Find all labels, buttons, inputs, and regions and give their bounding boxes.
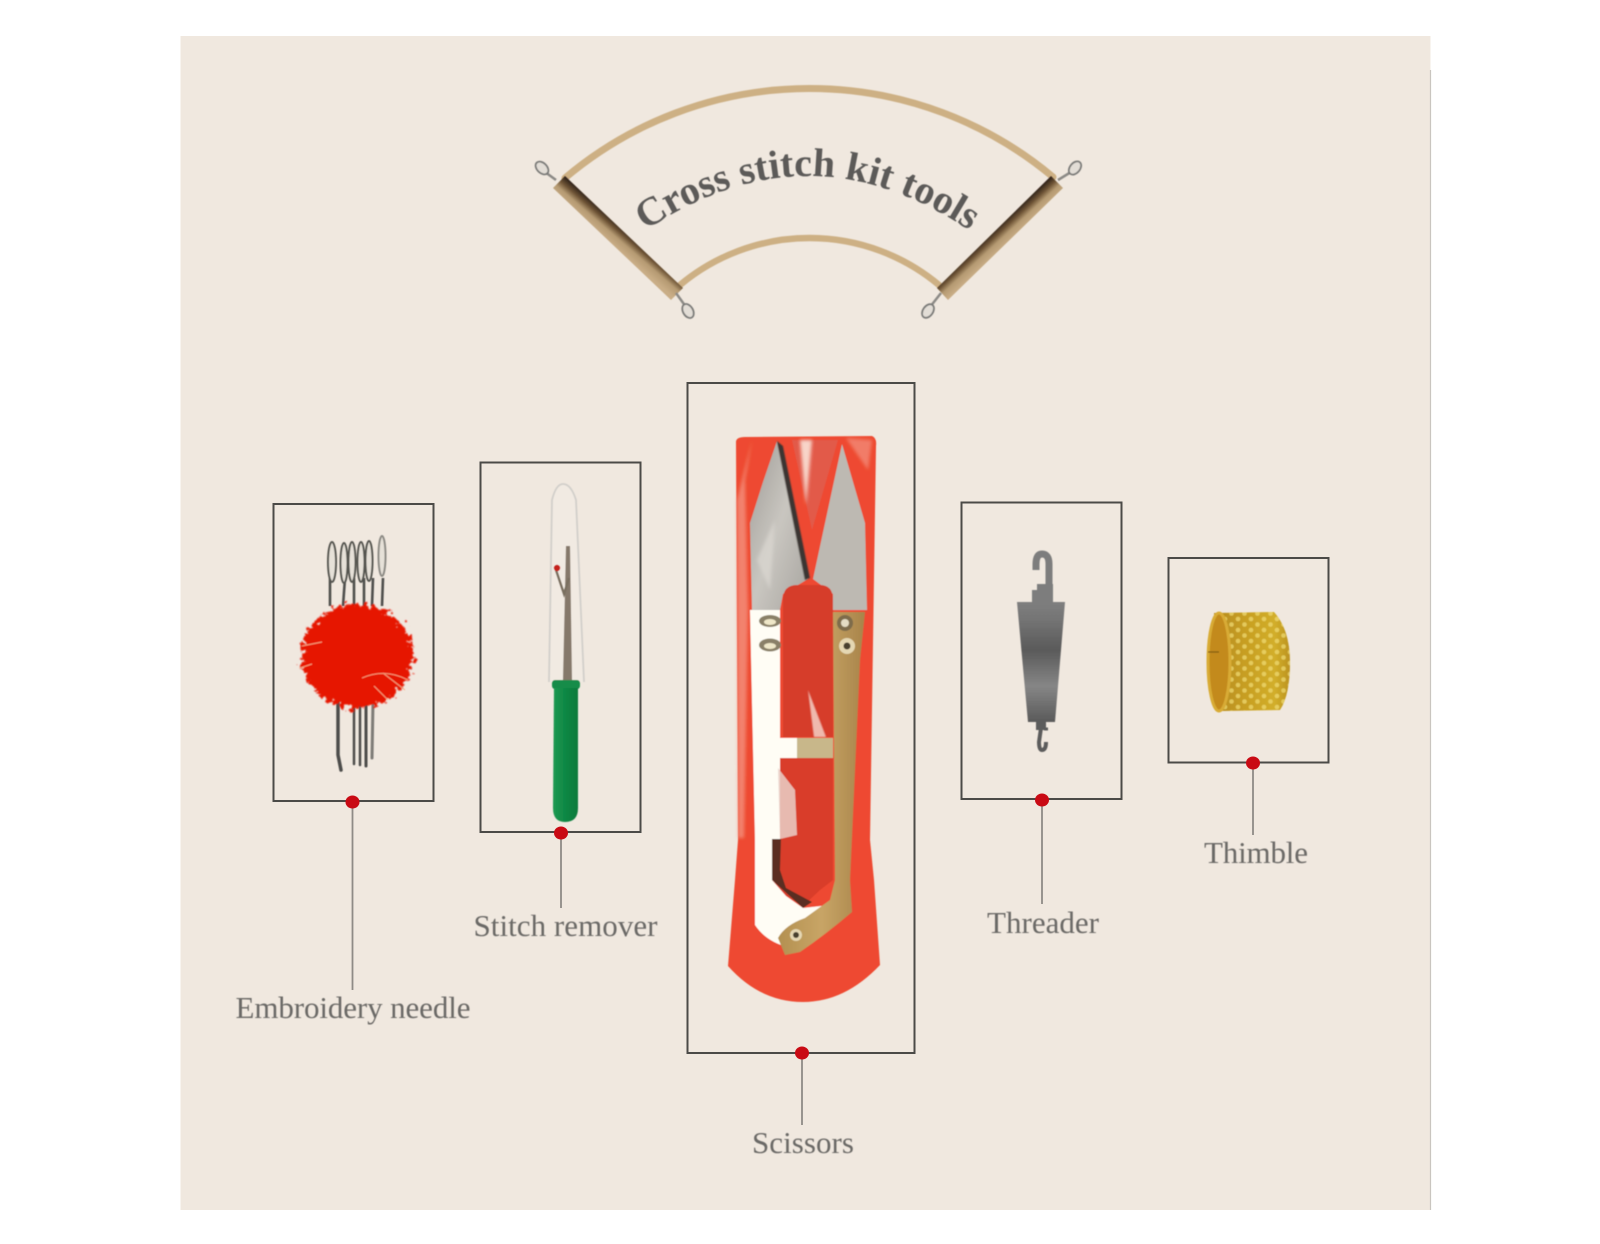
label: scissors: Scissors	[752, 1125, 854, 1160]
label: thimble: Thimble	[1204, 835, 1308, 870]
tool: stitch remover	[474, 462, 658, 943]
icon: thread snips in red sleeve	[728, 436, 880, 1002]
frame: right roller	[920, 159, 1084, 320]
icon: gold thimble	[1208, 612, 1290, 711]
part: brass arm	[778, 612, 865, 955]
title text: Cross stitch kit tools	[637, 148, 978, 229]
icon: metal needle threader	[1017, 554, 1065, 750]
tool: thimble	[1168, 558, 1328, 870]
title banner: embroidery frame with curved heading	[534, 84, 1083, 320]
tool: embroidery needle	[236, 504, 470, 1025]
icon: seam ripper	[549, 484, 584, 822]
frame: threader box	[962, 502, 1122, 799]
frame: scissors box	[688, 383, 914, 1053]
part: upper red handle	[783, 585, 833, 737]
label: threader: Threader	[987, 905, 1100, 940]
part: lower red handle	[772, 758, 833, 906]
marker and leader	[346, 796, 360, 990]
marker and leader	[1246, 756, 1260, 835]
tool: threader	[962, 502, 1122, 940]
frame: outer and inner cords	[565, 89, 1053, 285]
icon: needles and red pompom	[300, 536, 413, 770]
panel: cream background	[180, 36, 1430, 1210]
tool: scissors	[688, 383, 914, 1160]
part: cream frame	[750, 610, 830, 946]
marker and leader	[554, 826, 568, 908]
part: left blade	[750, 441, 808, 610]
part: right blade	[813, 444, 867, 610]
marker and leader	[795, 1046, 809, 1125]
label: stitch remover: Stitch remover	[474, 908, 658, 943]
frame: thimble box	[1168, 558, 1328, 762]
frame: left roller	[533, 159, 696, 320]
marker and leader	[1035, 794, 1049, 904]
frame: needle box	[274, 504, 434, 801]
frame: stitch remover box	[480, 462, 640, 832]
label: embroidery needle: Embroidery needle	[236, 990, 470, 1025]
